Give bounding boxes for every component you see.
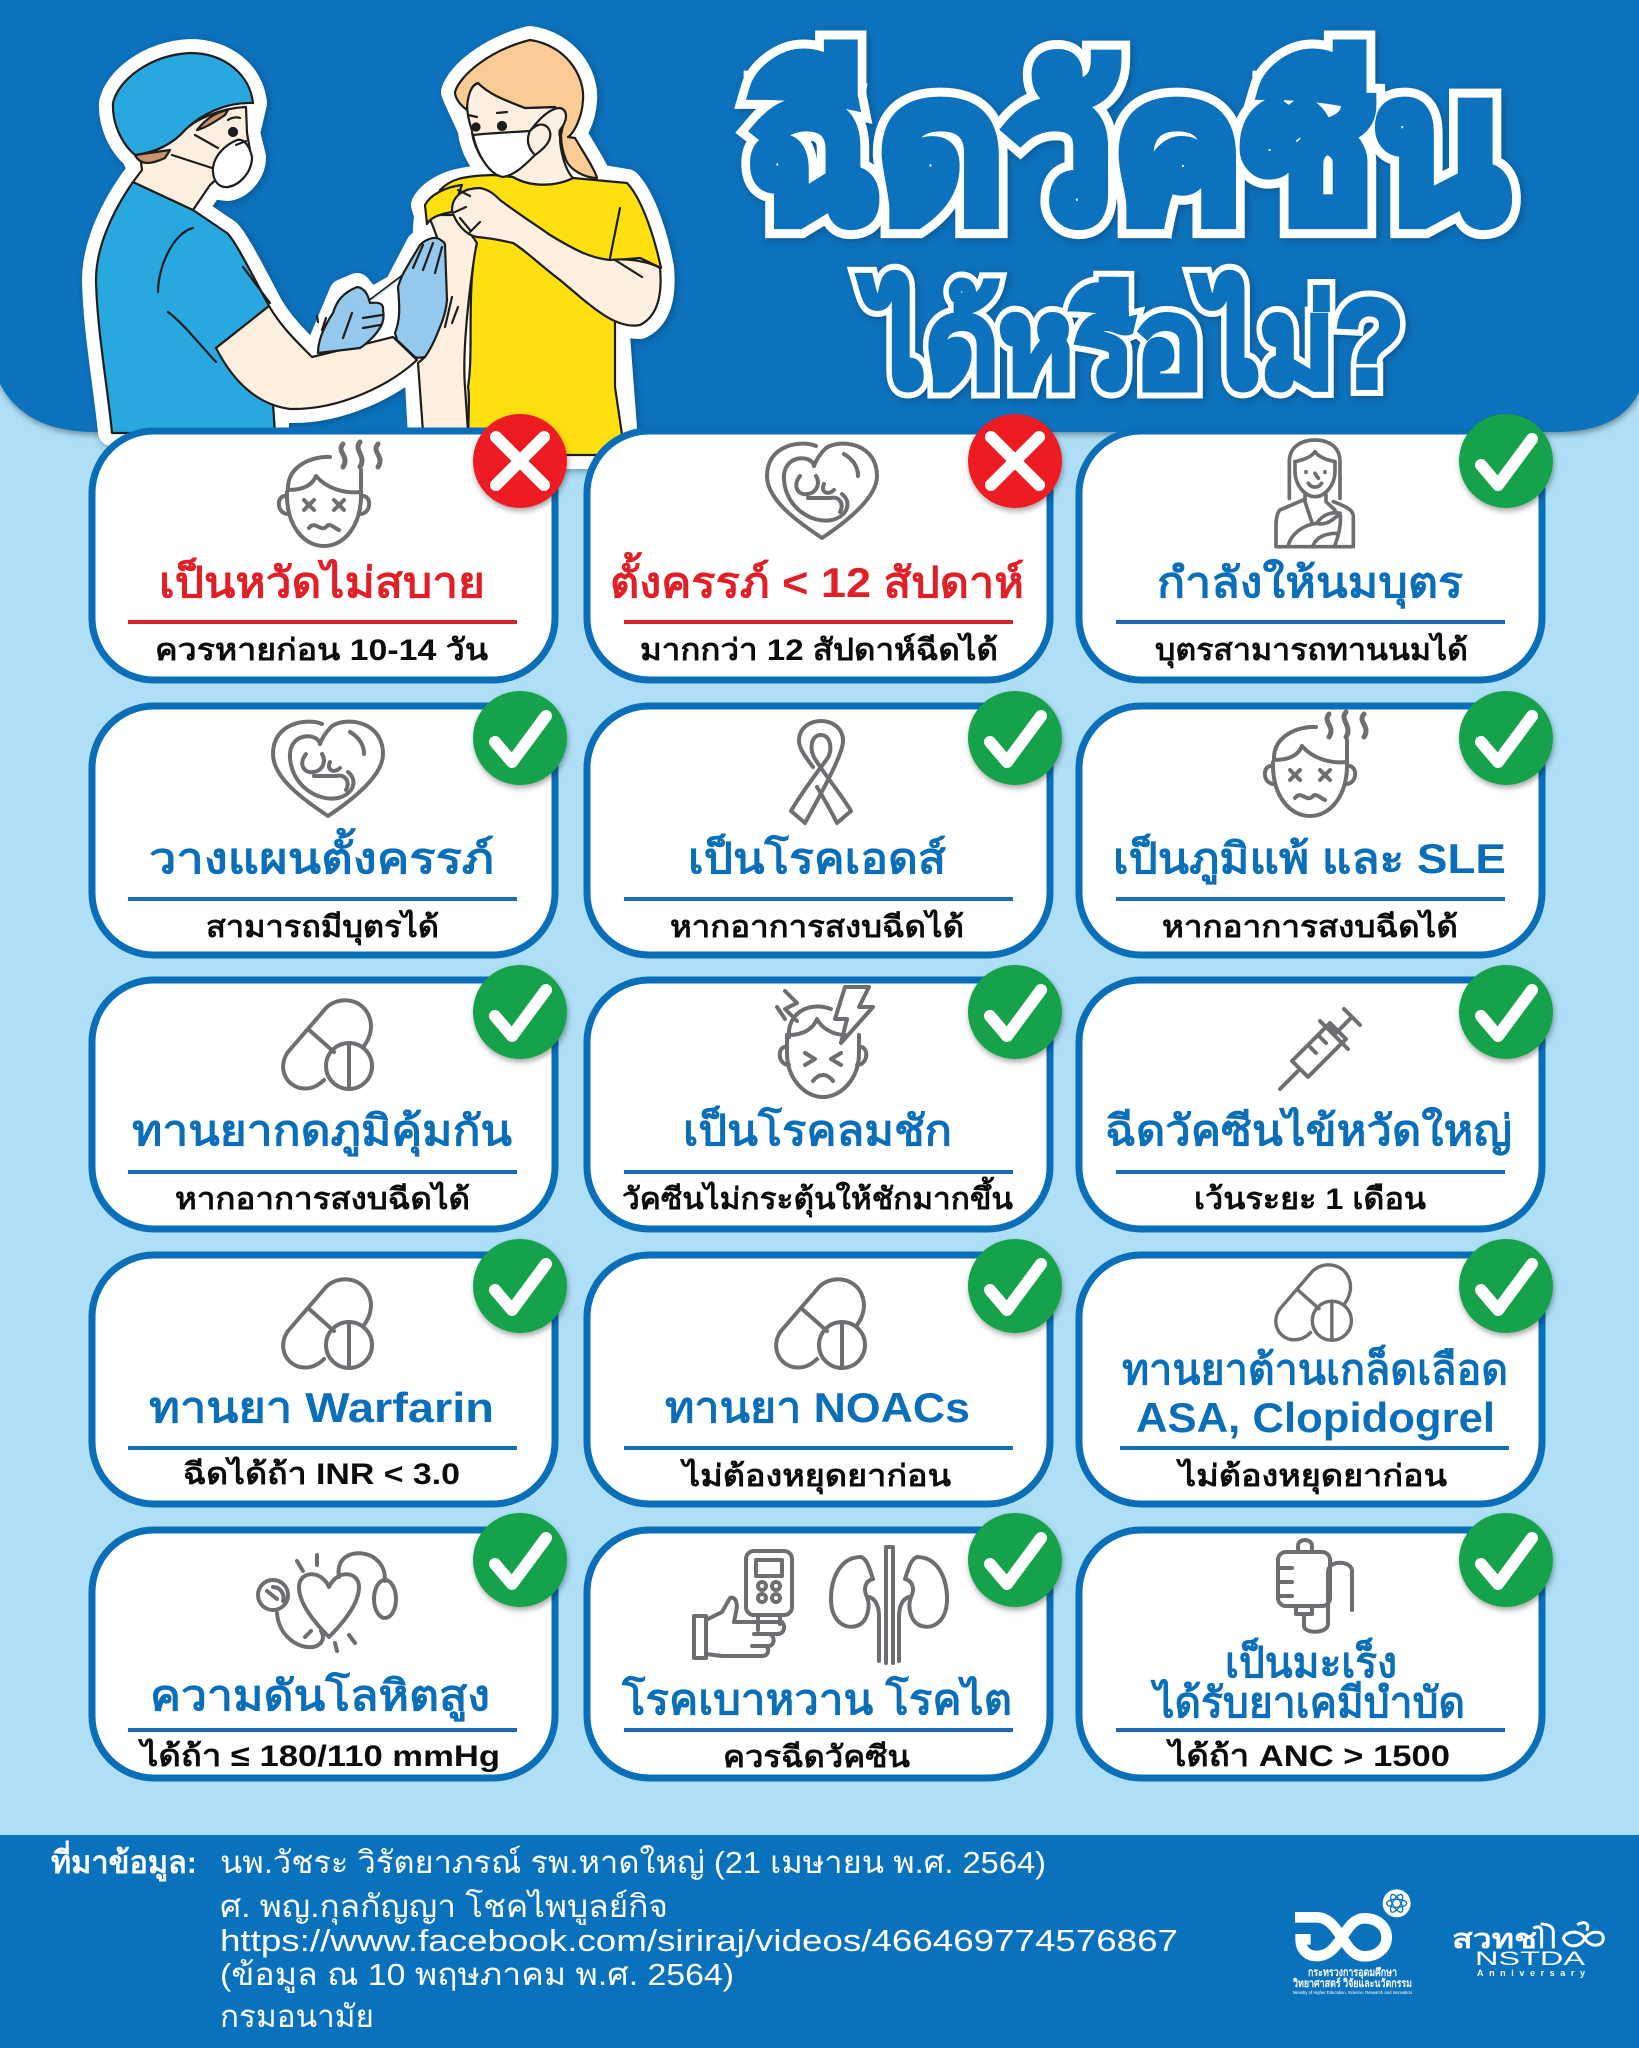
left glove bbox=[318, 287, 384, 353]
title line 1: ฉีดวัคซีน bbox=[746, 39, 1507, 262]
header band bbox=[0, 0, 1639, 432]
heading: ฉีดวัคซีนไข้หวัดใหญ่ bbox=[1105, 1106, 1512, 1156]
badge: cross bbox=[473, 414, 567, 508]
patient face bbox=[467, 83, 573, 185]
badge: cross bbox=[968, 414, 1062, 508]
heading: โรคเบาหวาน โรคไต bbox=[621, 1675, 1012, 1723]
patient hair bbox=[455, 40, 597, 178]
badge: check bbox=[473, 691, 567, 785]
card: immunosuppressants bbox=[92, 965, 567, 1229]
card: breastfeeding bbox=[1079, 414, 1553, 680]
badge: check bbox=[1459, 965, 1553, 1059]
icon: glucose meter and hand bbox=[694, 1551, 792, 1658]
heading: เป็นภูมิแพ้ และ SLE bbox=[1113, 833, 1506, 885]
syringe bbox=[350, 275, 403, 315]
logo: ministry: Ministry of Higher Education, Science, Research and Innovation bbox=[1293, 1990, 1412, 1995]
heading: วางแผนตั้งครรภ์ bbox=[149, 827, 494, 882]
icon: sick face bbox=[279, 442, 380, 546]
source line 3: https://www.facebook.com/siriraj/videos/466469774576867 bbox=[220, 1923, 1178, 1958]
icon: fetus in heart bbox=[273, 722, 383, 816]
card: cancer chemotherapy bbox=[1079, 1513, 1553, 1778]
logo: NSTDA anniversary bbox=[1452, 1923, 1603, 1978]
nurse arm bbox=[216, 306, 417, 409]
badge: check bbox=[1459, 414, 1553, 508]
badge: check bbox=[473, 965, 567, 1059]
forearm and hand bbox=[452, 188, 661, 326]
right glove bbox=[395, 238, 447, 358]
illustration: nurse vaccinating a patient bbox=[96, 40, 661, 455]
card: warfarin bbox=[92, 1239, 567, 1504]
subtext: บุตรสามารถทานนมได้ bbox=[1155, 632, 1468, 669]
subtext: ไม่ต้องหยุดยาก่อน bbox=[680, 1458, 952, 1495]
card: allergy and SLE bbox=[1079, 691, 1553, 955]
heading: ทานยาต้านเกล็ดเลือด bbox=[1122, 1344, 1508, 1393]
icon: headache bbox=[777, 987, 873, 1097]
heading: ความดันโลหิตสูง bbox=[150, 1671, 490, 1722]
logo: ministry: วิทยาศาสตร์ วิจัยและนวัตกรรม bbox=[1292, 1977, 1412, 1990]
card: influenza vaccine bbox=[1079, 965, 1553, 1229]
patient mask bbox=[473, 131, 535, 177]
logo: ministry bbox=[1292, 1889, 1412, 1995]
subtext: ควรฉีดวัคซีน bbox=[723, 1741, 911, 1774]
badge: check bbox=[1459, 1239, 1553, 1333]
patient arm bbox=[418, 215, 477, 432]
badge: check bbox=[473, 1513, 567, 1607]
logo: NSTDA anniversary: NSTDA bbox=[1475, 1949, 1586, 1970]
card: hypertension bbox=[92, 1513, 567, 1778]
heading second line: ASA, Clopidogrel bbox=[1136, 1394, 1495, 1441]
heading: กำลังให้นมบุตร bbox=[1157, 558, 1463, 609]
icon: pills bbox=[283, 1000, 372, 1089]
logo: NSTDA anniversary: สวทช bbox=[1452, 1924, 1537, 1954]
heading: เป็นโรคเอดส์ bbox=[688, 833, 946, 882]
badge: check bbox=[968, 691, 1062, 785]
card: NOACs bbox=[587, 1239, 1062, 1504]
icon: sick face bbox=[1265, 712, 1366, 816]
subtext: ได้ถ้า ≤ 180/110 mmHg bbox=[138, 1738, 500, 1773]
icon: kidneys bbox=[831, 1547, 947, 1663]
subtext: หากอาการสงบฉีดได้ bbox=[175, 1181, 470, 1216]
badge: check bbox=[968, 1513, 1062, 1607]
icon: pills bbox=[776, 1279, 865, 1368]
subtext: เว้นระยะ 1 เดือน bbox=[1194, 1183, 1427, 1216]
icon: syringe bbox=[1280, 1009, 1360, 1089]
card: HIV/AIDS bbox=[587, 691, 1062, 955]
heading: ทานยา NOACs bbox=[665, 1384, 970, 1431]
badge: check bbox=[968, 965, 1062, 1059]
card: antiplatelets bbox=[1079, 1239, 1553, 1504]
heading: เป็นโรคลมชัก bbox=[683, 1105, 952, 1154]
nurse face bbox=[133, 107, 250, 210]
badge: check bbox=[968, 1239, 1062, 1333]
card: planning pregnancy bbox=[92, 691, 567, 955]
subtext: หากอาการสงบฉีดได้ bbox=[670, 909, 964, 944]
heading: ตั้งครรภ์ < 12 สัปดาห์ bbox=[610, 551, 1024, 606]
icon: blood pressure heart bbox=[258, 1553, 396, 1651]
heading: เป็นหวัดไม่สบาย bbox=[159, 557, 485, 606]
nurse cap bbox=[113, 53, 253, 155]
source label: ที่มาข้อมูล: bbox=[51, 1840, 197, 1882]
nurse mask bbox=[213, 140, 252, 187]
footer: sources bbox=[51, 1840, 1178, 2034]
badge: check bbox=[1459, 1513, 1553, 1607]
heading: เป็นมะเร็ง bbox=[1225, 1637, 1397, 1686]
subtext: ได้ถ้า ANC > 1500 bbox=[1166, 1738, 1450, 1773]
source line 4: (ข้อมูล ณ 10 พฤษภาคม พ.ศ. 2564) bbox=[220, 1957, 734, 1993]
icon: IV drip bag bbox=[1278, 1540, 1352, 1632]
badge: check bbox=[473, 1239, 567, 1333]
title line 1: ฉีดวัคซีน bbox=[746, 39, 1507, 262]
badge: check bbox=[1459, 691, 1553, 785]
card: epilepsy bbox=[587, 965, 1062, 1229]
heading second line: ได้รับยาเคมีบำบัด bbox=[1150, 1678, 1465, 1726]
card: sick with a cold bbox=[92, 414, 567, 680]
subtext: สามารถมีบุตรได้ bbox=[206, 909, 439, 946]
card: diabetes and kidney disease bbox=[587, 1513, 1062, 1778]
heading: ทานยากดภูมิคุ้มกัน bbox=[132, 1107, 512, 1157]
icon: ribbon bbox=[791, 721, 851, 823]
logo: NSTDA anniversary: Anniversary bbox=[1477, 1968, 1585, 1978]
icon: pills bbox=[283, 1279, 372, 1368]
icon: fetus in heart bbox=[767, 444, 877, 538]
source line 1: นพ.วัชระ วิรัตยาภรณ์ รพ.หาดใหญ่ (21 เมษายน พ.ศ. 2564) bbox=[220, 1845, 1046, 1880]
logo: ministry: กระทรวงการอุดมศึกษา bbox=[1308, 1966, 1397, 1980]
icon: mother and baby bbox=[1276, 440, 1353, 547]
subtext: มากกว่า 12 สัปดาห์ฉีดได้ bbox=[640, 632, 998, 667]
shirt bbox=[440, 175, 661, 455]
title line 2: ได้หรือไม่? bbox=[858, 273, 1404, 414]
subtext: ไม่ต้องหยุดยาก่อน bbox=[1176, 1458, 1448, 1495]
nurse body bbox=[96, 182, 275, 433]
subtext: หากอาการสงบฉีดได้ bbox=[1162, 909, 1458, 944]
subtext: วัคซีนไม่กระตุ้นให้ชักมากขึ้น bbox=[622, 1176, 1014, 1218]
subtext: ควรหายก่อน 10-14 วัน bbox=[155, 634, 489, 667]
icon: pills small bbox=[1276, 1265, 1351, 1340]
source line 5: กรมอนามัย bbox=[220, 1999, 374, 2034]
subtext: ฉีดได้ถ้า INR < 3.0 bbox=[183, 1456, 460, 1491]
rolled sleeve bbox=[425, 185, 462, 224]
card: pregnant under 12 weeks bbox=[587, 414, 1062, 680]
title line 2: ได้หรือไม่? bbox=[858, 273, 1404, 414]
heading: ทานยา Warfarin bbox=[149, 1384, 494, 1431]
source line 2: ศ. พญ.กุลกัญญา โชคไพบูลย์กิจ bbox=[220, 1889, 668, 1926]
footer band bbox=[0, 1835, 1639, 2048]
